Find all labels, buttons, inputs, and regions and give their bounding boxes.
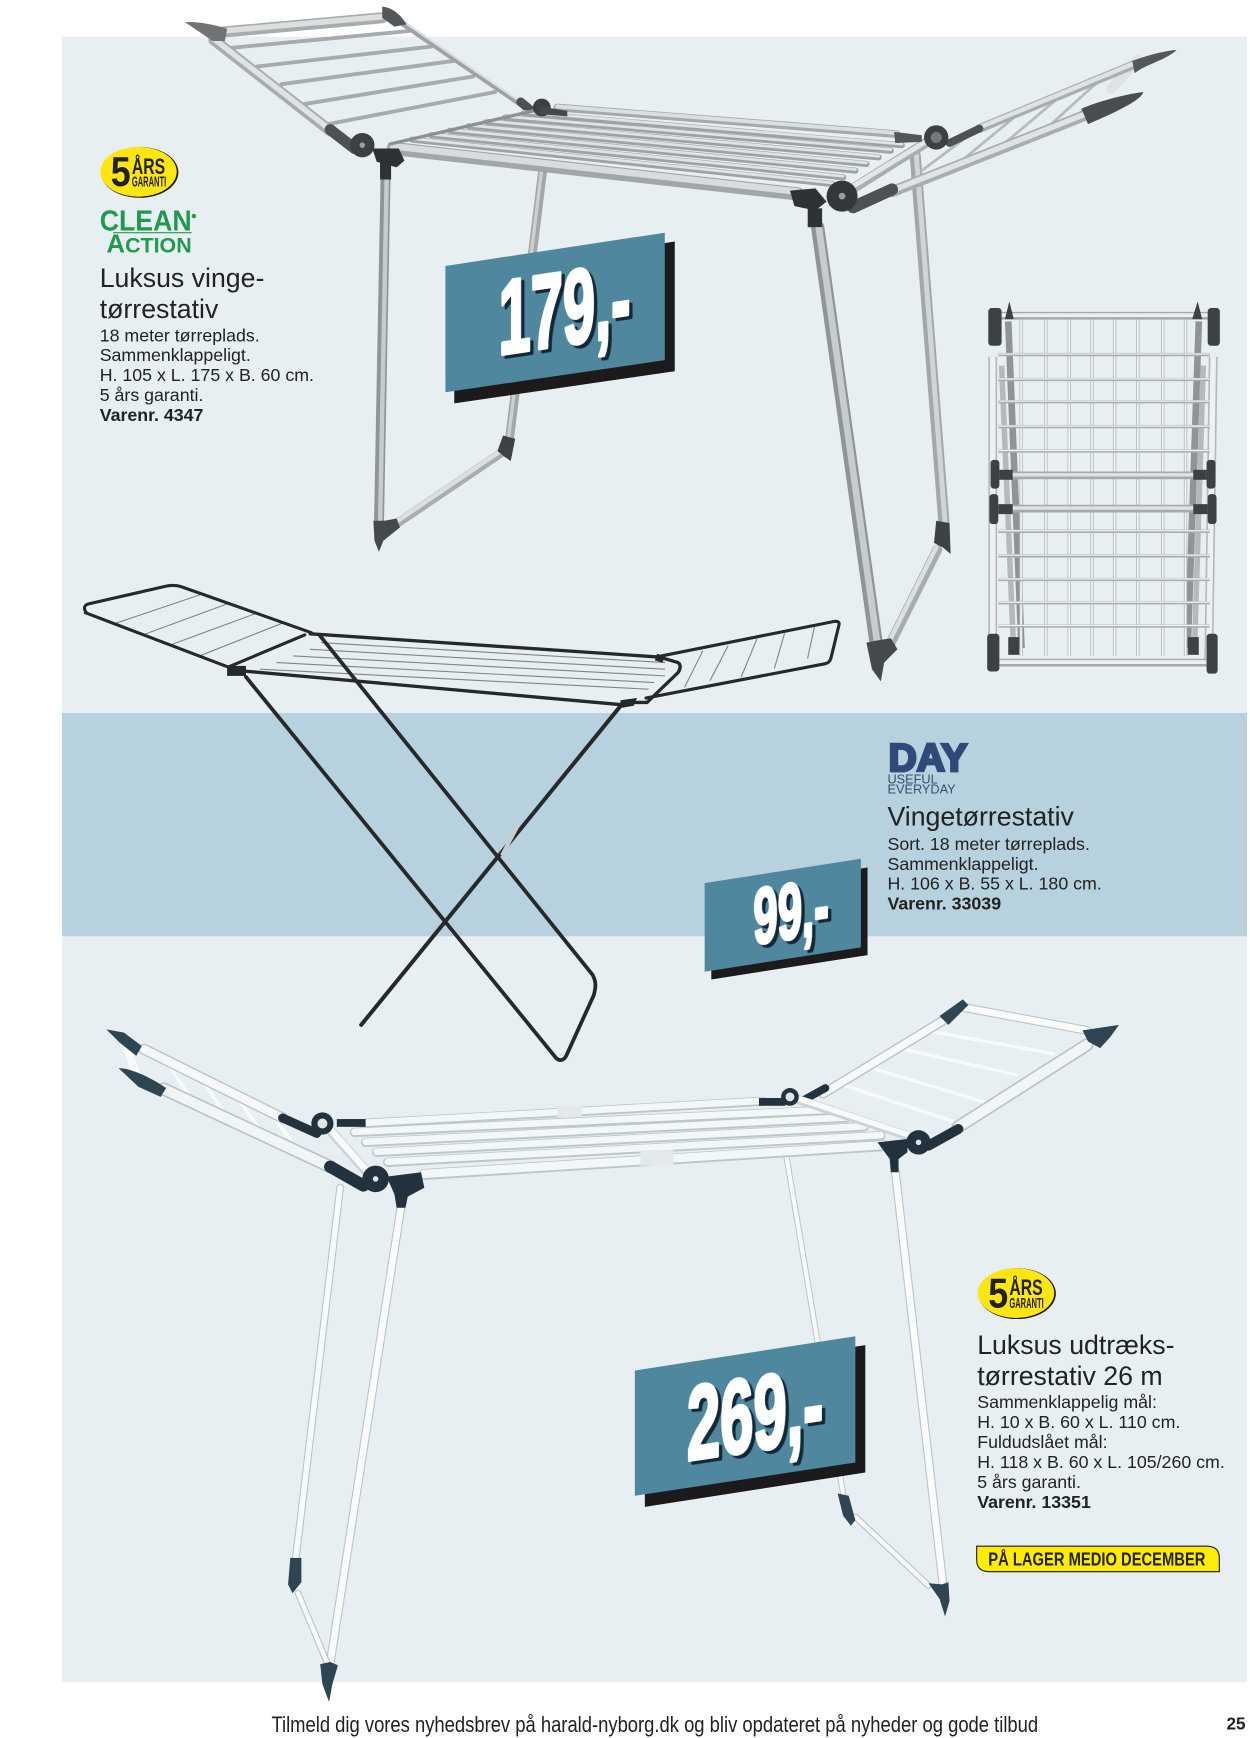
logo: Clean Action bbox=[100, 205, 196, 259]
product info: Luksus udtræks-tørrestativ bbox=[977, 1268, 1225, 1572]
hinges and joints bbox=[350, 99, 948, 227]
description: H. 106 x B. 55 x L. 180 cm. bbox=[887, 874, 1102, 894]
back legs bbox=[394, 155, 951, 645]
description: Sammenklappeligt. bbox=[887, 854, 1039, 874]
product info: Luksus vinge-tørrestativ bbox=[100, 147, 314, 425]
hinges bbox=[227, 654, 665, 708]
heading: Vingetørrestativ bbox=[887, 801, 1075, 831]
description bbox=[977, 1392, 1225, 1512]
description: Sammenklappelig mål: bbox=[977, 1392, 1157, 1412]
description bbox=[887, 834, 1102, 914]
side tubes bbox=[993, 321, 1213, 660]
product image: black winged drying rack bbox=[84, 585, 839, 1060]
left wing bbox=[185, 7, 534, 148]
badge: 5 års garanti bbox=[978, 1268, 1056, 1319]
description: Sammenklappeligt. bbox=[100, 345, 251, 365]
price tag: 99,-: 99,- bbox=[753, 861, 829, 961]
description: 5 års garanti. bbox=[977, 1472, 1081, 1492]
description: H. 118 x B. 60 x L. 105/260 cm. bbox=[977, 1452, 1225, 1472]
back leg and brace bbox=[787, 1158, 928, 1586]
description: 5 års garanti. bbox=[100, 385, 203, 405]
description: Sort. 18 meter tørreplads. bbox=[887, 834, 1090, 854]
description: H. 105 x L. 175 x B. 60 cm. bbox=[100, 365, 314, 385]
hinges and joints bbox=[311, 1088, 931, 1208]
wing and rail wires bbox=[114, 595, 814, 689]
logo: Clean Action: ACTION bbox=[106, 231, 192, 259]
description: H. 10 x B. 60 x L. 110 cm. bbox=[977, 1412, 1180, 1432]
badge: 5 års garanti: ÅRS bbox=[132, 153, 165, 179]
horizontal rods bbox=[998, 354, 1210, 626]
front legs bbox=[288, 1171, 950, 1702]
right wing bbox=[844, 50, 1177, 207]
product image: white extendable drying rack bbox=[106, 999, 1119, 1702]
badge: 5 års garanti: GARANTI bbox=[1009, 1296, 1044, 1312]
thick bars bbox=[999, 315, 1209, 663]
description bbox=[100, 325, 314, 425]
badge: 5 års garanti: 5 bbox=[111, 148, 131, 195]
description: Varenr. 33039 bbox=[887, 894, 1001, 914]
description: Varenr. 4347 bbox=[100, 405, 204, 425]
badge: 5 års garanti bbox=[100, 147, 178, 198]
product info: Vingetørrestativ bbox=[887, 737, 1102, 914]
logo: Day Useful Everyday: EVERYDAY bbox=[887, 781, 956, 796]
heading: tørrestativ bbox=[100, 294, 219, 324]
vertical rods bbox=[1021, 319, 1186, 656]
heading: tørrestativ 26 m bbox=[977, 1361, 1163, 1391]
left wing frame bbox=[84, 585, 311, 667]
page number: 25 bbox=[1227, 1714, 1246, 1734]
footer newsletter line: Tilmeld dig vores nyhedsbrev på harald-nyborg.dk og bliv opdateret på nyheder og gode tilbud bbox=[271, 1712, 1038, 1737]
price tag: 99,- bbox=[705, 859, 868, 979]
main rails bbox=[390, 106, 902, 194]
main frame bbox=[236, 634, 680, 705]
description: Varenr. 13351 bbox=[977, 1492, 1091, 1512]
heading: Luksus udtræks- bbox=[977, 1330, 1174, 1360]
price tag: 179,-: 179,- bbox=[499, 240, 630, 377]
front legs bbox=[373, 177, 897, 681]
product image: folded drying rack bbox=[987, 301, 1220, 674]
locking clip bbox=[502, 824, 519, 855]
right wing bbox=[803, 999, 1119, 1146]
heading bbox=[100, 263, 264, 324]
price tag: 179,- bbox=[445, 233, 675, 403]
badge: 5 års garanti: GARANTI bbox=[132, 175, 166, 191]
middle colour band bbox=[62, 713, 1247, 936]
heading bbox=[977, 1330, 1174, 1391]
left wing bbox=[106, 1029, 363, 1186]
description: Fuldudslået mål: bbox=[977, 1432, 1108, 1452]
badge: 5 års garanti: 5 bbox=[988, 1269, 1008, 1316]
heading: Luksus vinge- bbox=[100, 263, 264, 293]
legs bbox=[246, 636, 595, 1060]
logo: Clean Action: CLEAN bbox=[100, 205, 192, 237]
description: 18 meter tørreplads. bbox=[100, 325, 260, 345]
logo: Day Useful Everyday: DAY bbox=[889, 737, 967, 780]
product image: silver winged drying rack bbox=[185, 7, 1177, 681]
logo: Day Useful Everyday: USEFUL bbox=[887, 771, 938, 786]
main rails bbox=[328, 1098, 911, 1177]
price tag: 269,-: 269,- bbox=[687, 1345, 823, 1483]
dark connectors bbox=[987, 301, 1220, 674]
badge: 5 års garanti: ÅRS bbox=[1009, 1274, 1043, 1300]
price tag: 269,- bbox=[635, 1336, 865, 1507]
right wing frame bbox=[646, 621, 839, 698]
